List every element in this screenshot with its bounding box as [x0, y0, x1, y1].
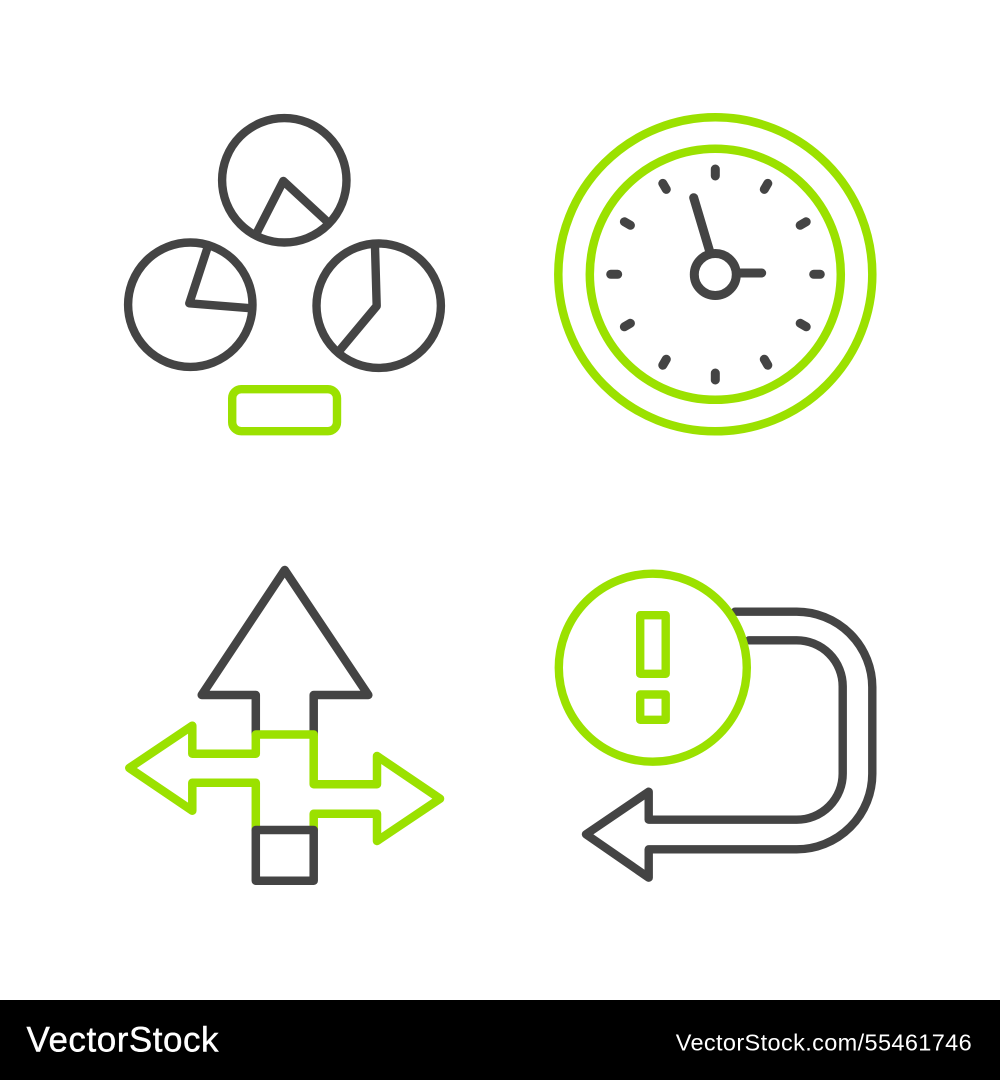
image credit url: VectorStock.com/55461746	[676, 1030, 972, 1056]
icon: three pie charts with rounded rectangle	[128, 118, 441, 431]
icon: wall clock	[558, 117, 872, 431]
footer bar	[0, 1000, 1000, 1080]
icon: crossroads arrows	[129, 570, 440, 881]
icon: warning circle with return arrow	[559, 574, 872, 878]
brand wordmark: VectorStock	[26, 1020, 219, 1060]
